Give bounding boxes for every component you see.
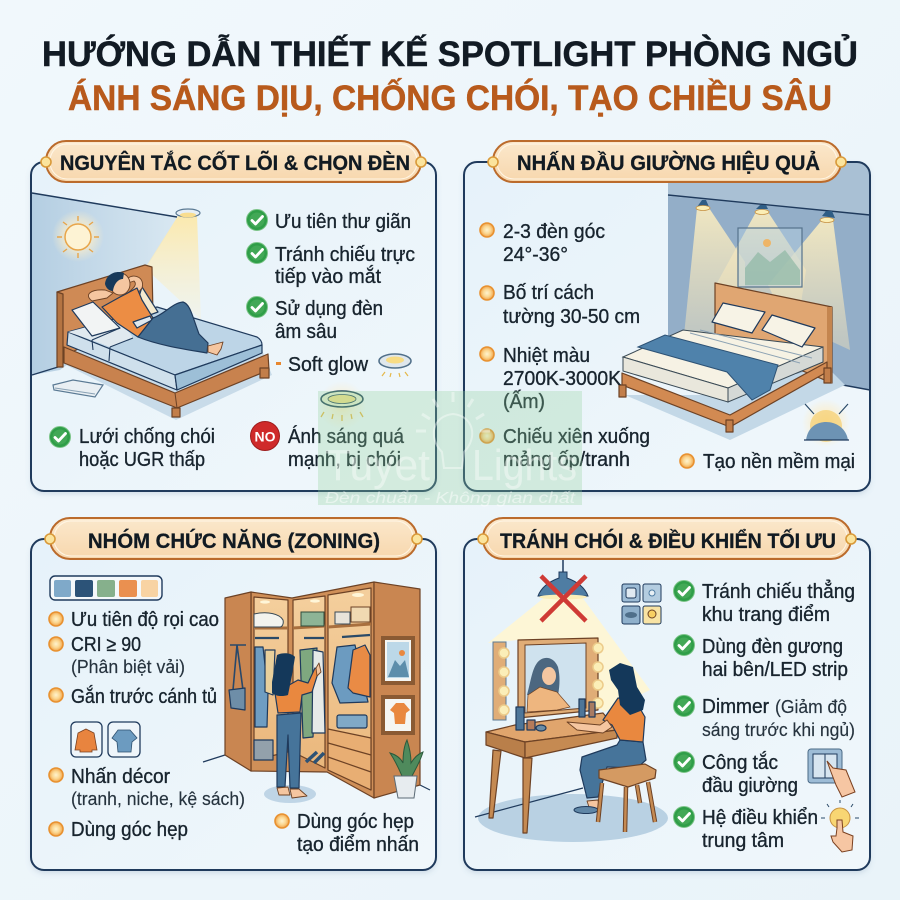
panel 3 list: CRI ≥ 90 <box>71 634 141 656</box>
panel 1 bullet list: Tránh chiếu trực <box>275 244 415 266</box>
panel 2 bullet list: Bố trí cách <box>503 282 594 304</box>
icon: clothing tiles <box>71 722 140 757</box>
panel 3 list: (Phân biệt vải) <box>71 657 185 677</box>
potted plant <box>390 740 423 798</box>
icon: wall switch with hand <box>808 749 855 797</box>
heading: headboard accent: NHẤN ĐẦU GIƯỜNG HIỆU QUẢ <box>517 151 820 175</box>
panel 3 list: Gắn trước cánh tủ <box>71 685 217 708</box>
panel 3 list: (tranh, niche, kệ sách) <box>71 789 245 809</box>
panel 4 list: (Giảm độ <box>775 697 847 717</box>
anti-glare note <box>50 426 215 471</box>
anti-glare note: hoặc UGR thấp <box>79 449 205 471</box>
panel 4 list: khu trang điểm <box>702 604 830 626</box>
panel 4 list: Dimmer <box>702 696 769 718</box>
narrow beam note: tạo điểm nhấn <box>297 834 419 856</box>
panel 1 bullet list: âm sâu <box>275 321 337 343</box>
panel 4 list: Dùng đèn gương <box>702 636 843 658</box>
panel 1 bullet list <box>246 210 415 376</box>
panel 2 bullet list: 24°-36° <box>503 244 568 266</box>
panel: glare and controls <box>464 539 870 870</box>
panel 4 list: hai bên/LED strip <box>702 659 848 681</box>
panel: zoning <box>31 539 436 870</box>
anti-glare note: Lưới chống chói <box>79 426 215 448</box>
panel 3 list <box>49 609 245 841</box>
icon: bulb with hand <box>821 800 859 852</box>
panel 2 bullet list <box>480 221 650 471</box>
panel 2 bullet list: 2-3 đèn góc <box>503 221 605 243</box>
panel 4 list: đầu giường <box>702 775 798 797</box>
heading: headboard accent <box>488 141 846 182</box>
watermark: Lights <box>472 441 577 490</box>
vanity illustration <box>475 560 668 842</box>
heading: glare and controls <box>478 518 856 559</box>
icon: soft glow downlight <box>379 354 411 377</box>
panel 2 bullet list: Nhiệt màu <box>503 345 590 367</box>
panel 2 bullet list: tường 30-50 cm <box>503 306 640 328</box>
too bright warning: NO <box>254 428 276 444</box>
panel 1 bullet list: tiếp vào mắt <box>275 265 381 288</box>
panel 1 bullet list: Soft glow <box>288 354 369 376</box>
bed illustration <box>619 162 870 440</box>
narrow beam note <box>275 811 419 856</box>
title <box>42 34 858 118</box>
heading: core principles <box>41 141 426 182</box>
icon grid <box>622 584 661 624</box>
panel 3 list: Dùng góc hẹp <box>71 819 188 841</box>
panel 2 bullet list: 2700K-3000K <box>503 368 622 390</box>
panel 4 list: Công tắc <box>702 751 778 774</box>
panel: headboard accent <box>464 162 870 491</box>
seated woman <box>567 663 656 832</box>
panel 4 list: Hệ điều khiển <box>702 807 818 829</box>
wardrobe illustration <box>203 582 430 803</box>
heading: zoning <box>45 518 422 559</box>
icon: glare downlight <box>318 381 366 429</box>
too bright warning: Ánh sáng quá <box>288 425 405 448</box>
panel: core principles <box>31 162 436 491</box>
bag on hook <box>229 645 246 710</box>
colour swatches <box>50 576 162 600</box>
panel 2 bullet list: mảng ốp/tranh <box>503 449 630 471</box>
panel 4 list: Tránh chiếu thẳng <box>702 579 855 603</box>
title: HƯỚNG DẪN THIẾT KẾ SPOTLIGHT PHÒNG NGỦ <box>42 34 858 74</box>
crossed out pendant lamp <box>538 560 588 621</box>
watermark: Tuyet <box>325 441 430 490</box>
woman in wardrobe <box>272 653 321 798</box>
heading: core principles: NGUYÊN TẮC CỐT LÕI & CHỌN ĐÈN <box>60 151 410 175</box>
panel 3 list: Ưu tiên độ rọi cao <box>71 609 219 631</box>
too bright warning <box>250 422 405 471</box>
panel 2 bullet list: Chiếu xiên xuống <box>503 426 650 448</box>
framed pictures <box>381 636 415 735</box>
watermark <box>318 391 582 507</box>
panel 1 bullet list: Ưu tiên thư giãn <box>275 211 411 233</box>
panel 4 list: trung tâm <box>702 830 784 852</box>
watermark: Đèn chuẩn - Không gian chất <box>325 489 576 507</box>
heading: zoning: NHÓM CHỨC NĂNG (ZONING) <box>88 529 380 553</box>
title: ÁNH SÁNG DỊU, CHỐNG CHÓI, TẠO CHIỀU SÂU <box>68 78 832 118</box>
panel 4 list <box>674 579 855 852</box>
icon: soft backdrop <box>802 399 850 447</box>
panel 1 bullet list: Sử dụng đèn <box>275 298 383 320</box>
soft backdrop note: Tạo nền mềm mại <box>703 451 855 473</box>
panel 4 list: sáng trước khi ngủ) <box>702 720 855 740</box>
panel 3 list: Nhấn décor <box>71 766 170 788</box>
too bright warning: mạnh, bị chói <box>288 449 401 471</box>
heading: glare and controls: TRÁNH CHÓI & ĐIỀU KHIỂN TỐI ƯU <box>500 529 836 553</box>
bedroom illustration <box>32 193 272 420</box>
panel 2 bullet list: (Ấm) <box>503 390 545 413</box>
narrow beam note: Dùng góc hẹp <box>297 811 414 833</box>
